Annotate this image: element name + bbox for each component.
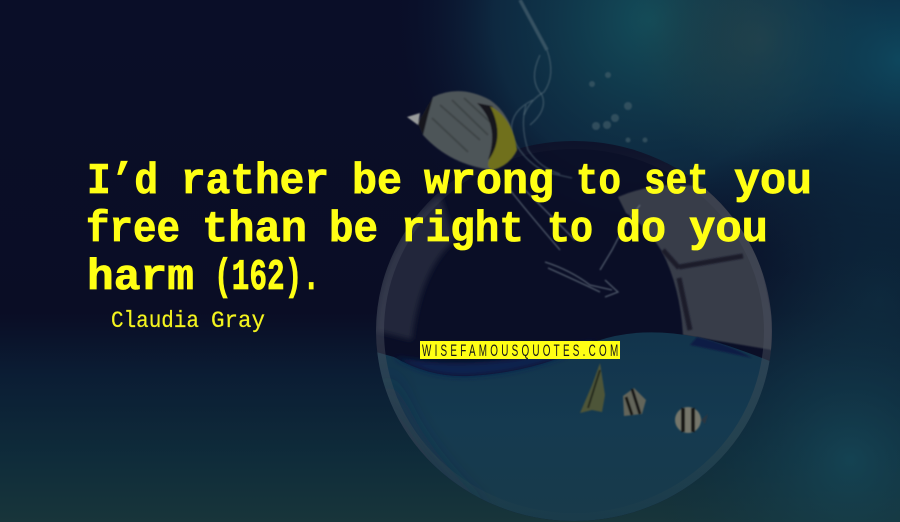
illustration: water stream bbox=[511, 0, 572, 178]
bowl rim bbox=[380, 145, 768, 517]
quote line 3: (162). bbox=[214, 253, 320, 303]
dark blue surface band bbox=[398, 357, 559, 378]
author: Gray bbox=[211, 308, 265, 334]
author: Claudia bbox=[111, 308, 199, 334]
quote line 1: be bbox=[352, 157, 402, 207]
surface shadow right bbox=[690, 337, 752, 358]
quote line 2: to bbox=[547, 205, 593, 255]
quote line 2: than bbox=[202, 205, 307, 255]
quote line 1: I’d bbox=[87, 157, 158, 207]
fish 1 bbox=[580, 363, 605, 413]
quote line 2: you bbox=[689, 205, 768, 255]
quote line 2: be bbox=[329, 205, 378, 255]
quote line 2: do bbox=[616, 205, 666, 255]
quote line 1: set bbox=[644, 157, 709, 207]
quote line 2 bbox=[86, 205, 768, 255]
watermark badge: WISEFAMOUSQUOTES.COM bbox=[422, 341, 618, 360]
illustration: droplets bbox=[589, 72, 648, 142]
quote line 2: right bbox=[401, 205, 524, 255]
quote line 3: harm bbox=[87, 253, 194, 303]
illustration: large butterfly fish bbox=[407, 91, 517, 170]
fish 2 bbox=[623, 388, 646, 416]
illustration: small fish bbox=[580, 363, 708, 433]
quote line 1: to bbox=[576, 157, 621, 207]
upper left glass tint bbox=[376, 195, 455, 340]
bowl interior bbox=[376, 141, 772, 521]
quote line 1: you bbox=[734, 157, 812, 207]
quote line 3 bbox=[87, 253, 320, 303]
quote line 2: free bbox=[86, 205, 180, 255]
left water shade bbox=[385, 370, 480, 515]
illustration: glass fish bowl bbox=[376, 141, 772, 521]
quote text bbox=[86, 157, 812, 303]
window bars bbox=[663, 250, 743, 330]
quote line 1: rather bbox=[181, 157, 329, 207]
quote line 1: wrong bbox=[424, 157, 554, 207]
water body bbox=[376, 332, 772, 521]
fish 3 bbox=[675, 407, 701, 433]
window reflection bbox=[618, 185, 772, 350]
illustration: splash inside bowl bbox=[510, 190, 640, 297]
quote line 1 bbox=[87, 157, 812, 207]
author bbox=[111, 308, 265, 334]
